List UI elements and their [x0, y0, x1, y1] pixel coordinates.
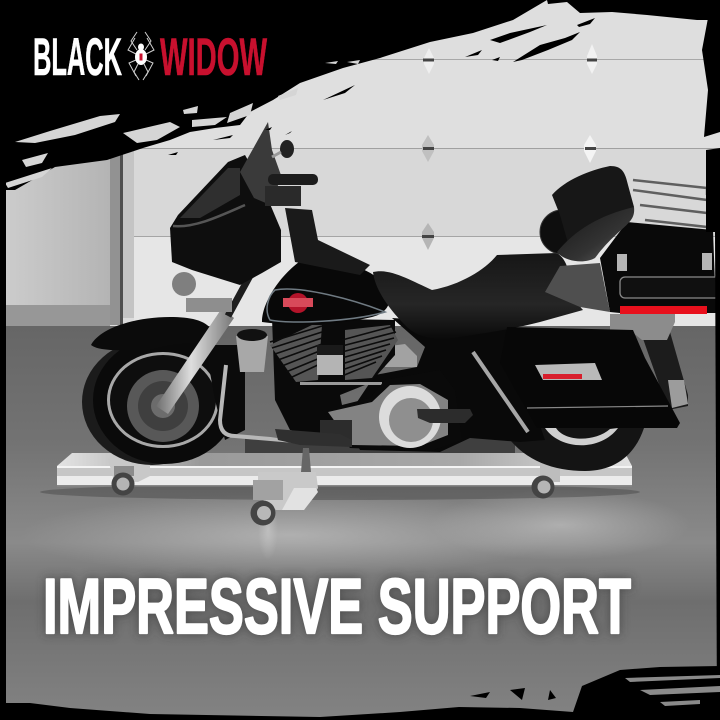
- engine centre housing: [317, 345, 343, 375]
- floor gap behind engine: [383, 344, 417, 367]
- logo word: WIDOW: WIDOW: [160, 28, 267, 87]
- brush highlights: [5, 60, 360, 188]
- footboards: [275, 409, 473, 447]
- aluminium rails: [57, 453, 632, 486]
- bottom right streaks: [625, 675, 720, 706]
- right caster: [532, 458, 560, 498]
- backrest: [540, 166, 634, 261]
- tank emblem: [283, 293, 313, 313]
- seat: [373, 253, 583, 339]
- motorcycle: [82, 122, 720, 471]
- saddlebag: [500, 327, 680, 428]
- fairing: [170, 155, 281, 296]
- tour trunk: [600, 180, 720, 314]
- garage background: [0, 0, 720, 330]
- transmission cover: [320, 370, 462, 451]
- windshield: [240, 122, 282, 204]
- fuel tank: [262, 255, 390, 324]
- trunk red light: [620, 306, 707, 314]
- right edge upper: [702, 18, 720, 137]
- luggage rack: [633, 180, 716, 228]
- air cleaner cup: [236, 329, 268, 372]
- door hinges: [422, 44, 597, 250]
- icon: spider: [128, 32, 154, 80]
- chrome strut: [473, 352, 528, 432]
- rear exhaust: [610, 314, 688, 410]
- left edge: [0, 150, 6, 720]
- bottom specks: [470, 688, 556, 700]
- saddlebag reflector: [535, 363, 602, 380]
- bottom brush stroke: [0, 666, 720, 720]
- middle caster: [250, 480, 283, 526]
- door panels: [134, 0, 720, 326]
- headlight: [172, 272, 196, 296]
- right edge lower: [715, 232, 720, 720]
- concrete floor: [0, 326, 720, 720]
- left wall: [0, 150, 110, 330]
- logo: BLACK: [33, 28, 122, 87]
- front fork: [156, 272, 252, 414]
- door frame: [110, 130, 134, 325]
- handlebar: [265, 174, 370, 275]
- rear wheel: [503, 410, 644, 471]
- trunk latches: [617, 253, 712, 271]
- crash bar: [220, 365, 330, 444]
- centre support arm: [258, 448, 318, 510]
- left caster: [108, 453, 150, 496]
- shadow under motorcycle: [245, 437, 515, 453]
- rear frame and swingarm: [345, 318, 545, 452]
- front wheel: [82, 336, 237, 465]
- dolly: [40, 448, 640, 526]
- side panel under backrest: [545, 263, 610, 312]
- mirror: [272, 140, 294, 158]
- front fender: [91, 317, 214, 350]
- brush streaks on door: [168, 18, 595, 155]
- engine block: [270, 318, 398, 440]
- top brush stroke: [0, 0, 720, 20]
- dolly shadow: [40, 484, 640, 500]
